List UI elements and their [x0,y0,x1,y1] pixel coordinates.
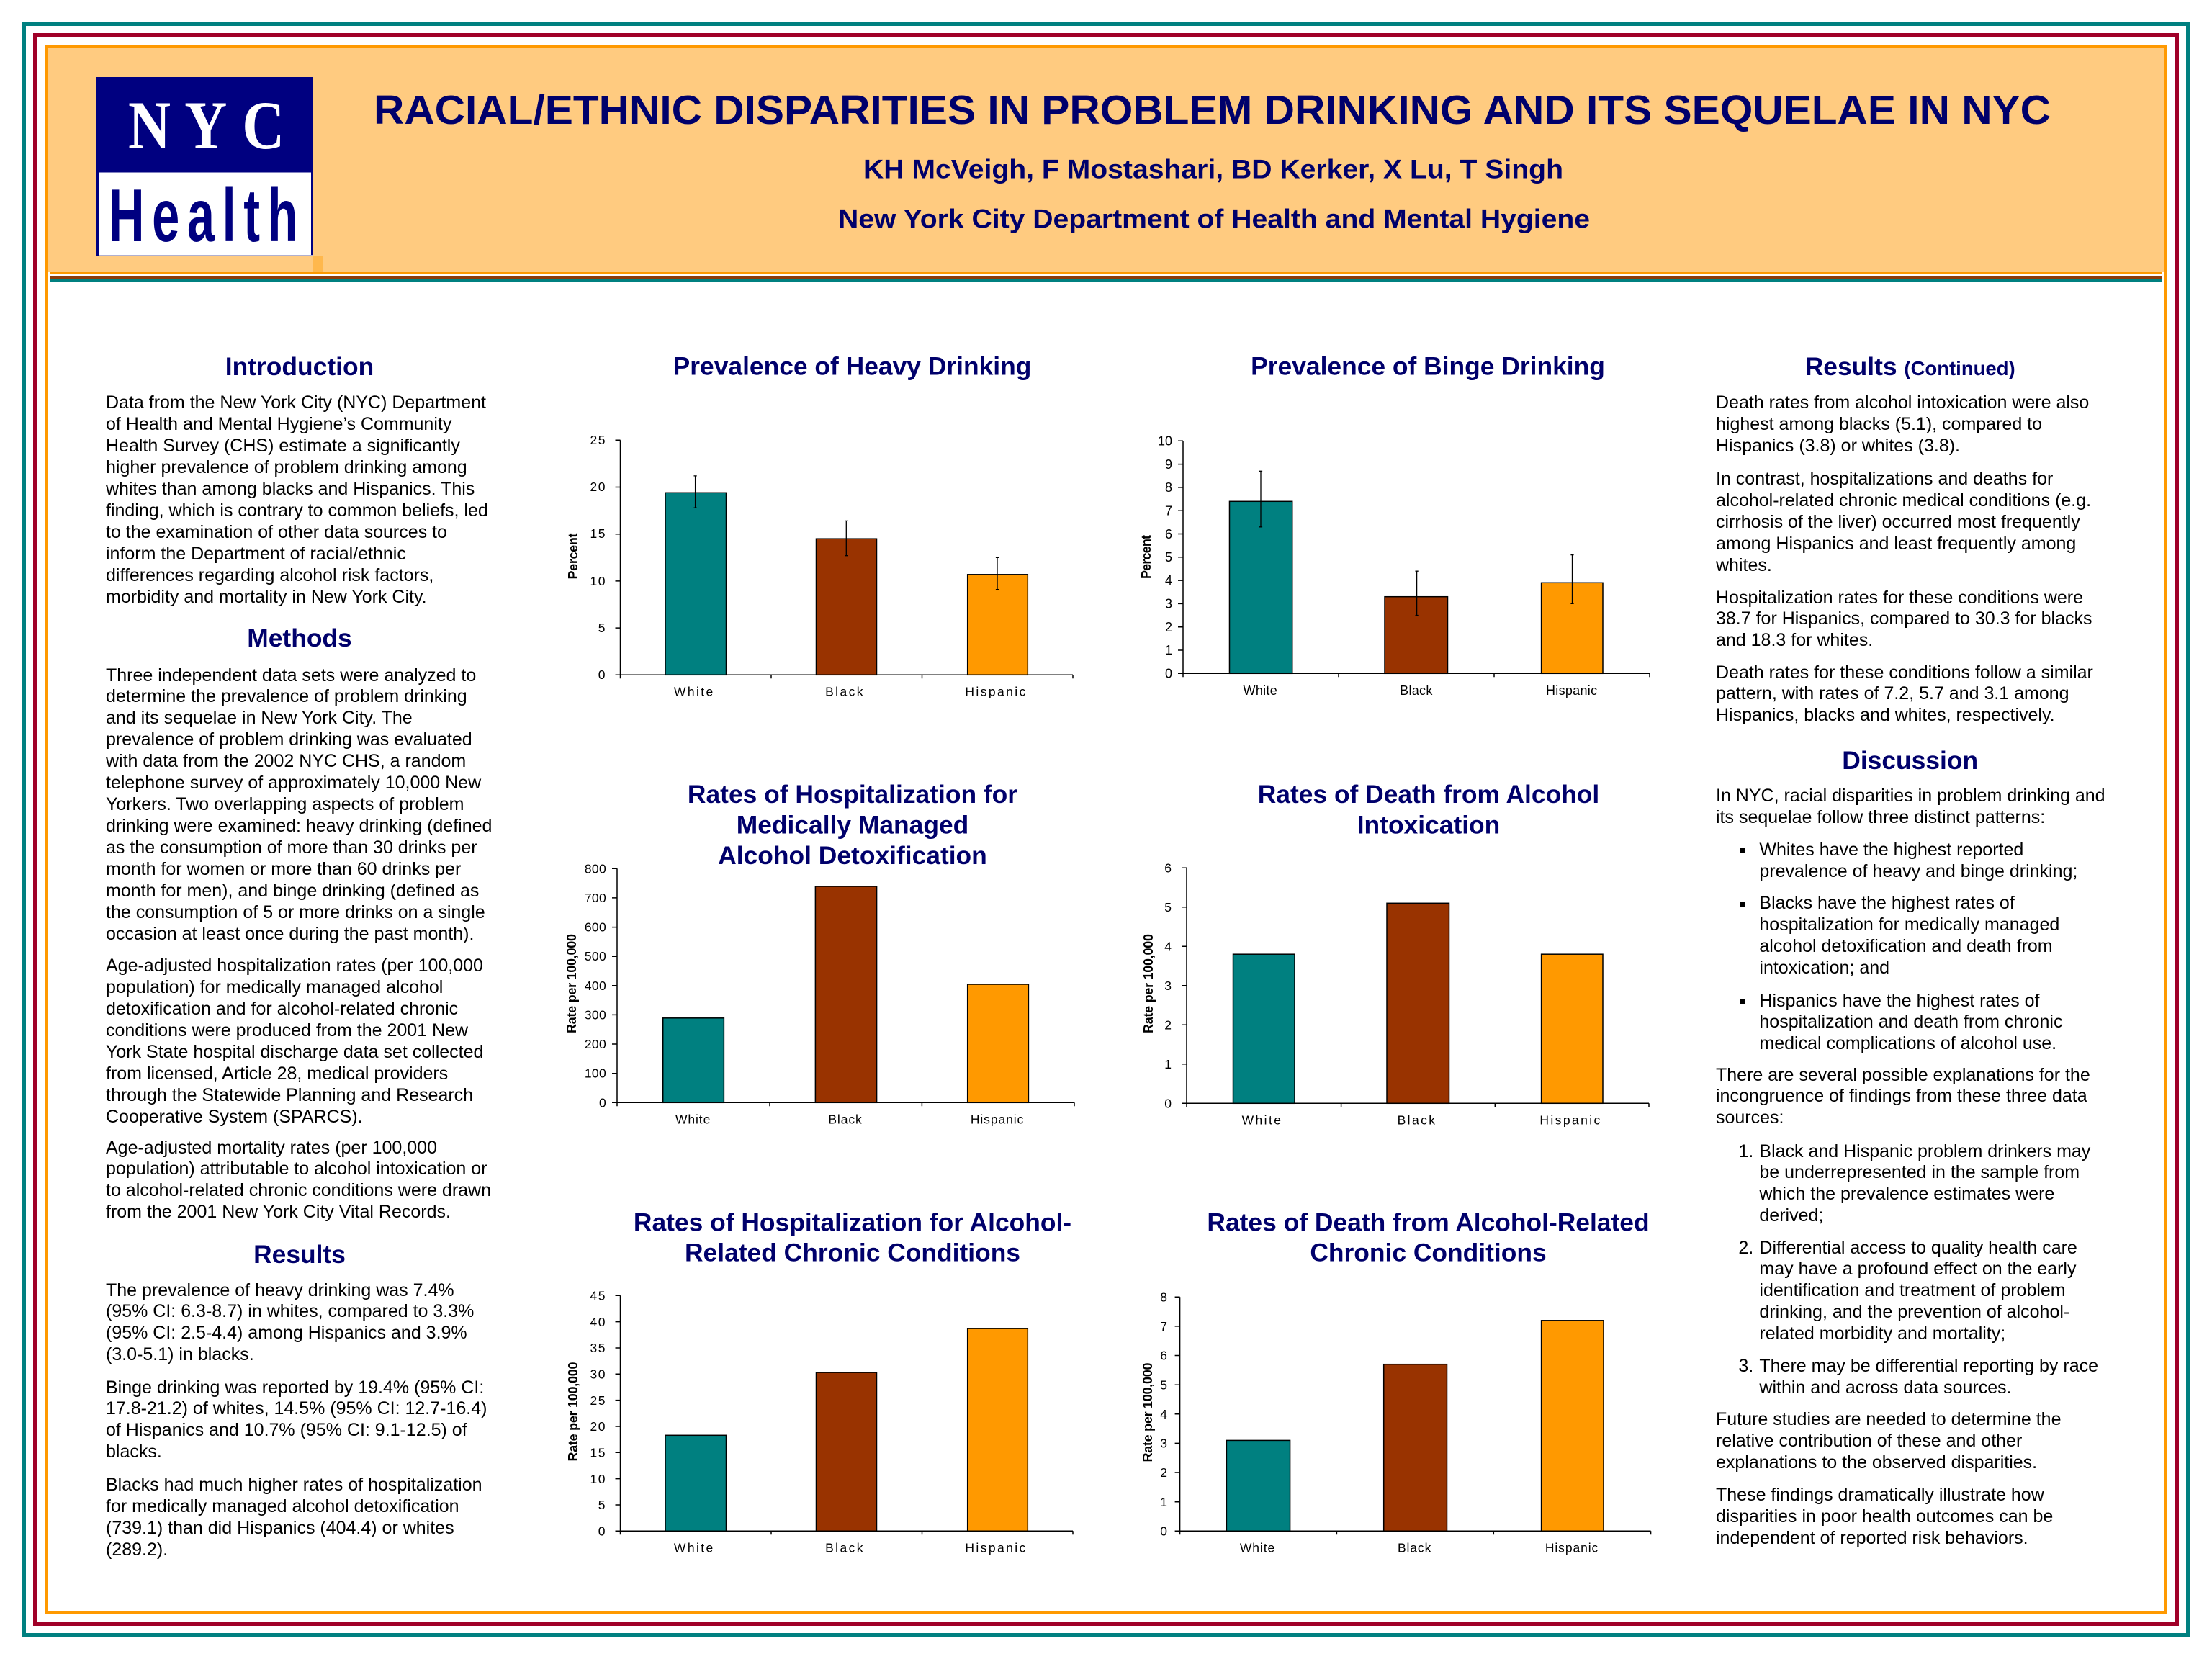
text: results continued paragraph 2: whites. [1716,555,1772,575]
heading: Discussion: Discussion [1842,746,1978,775]
bars [1230,501,1603,673]
text: results paragraph 2 [106,1377,487,1462]
text: methods paragraph 2: population) for medically managed alcohol [106,977,443,997]
y axis title: Percent [566,533,580,579]
bars [1233,903,1603,1103]
bars [1226,1321,1604,1531]
chart title: Medically Managed [737,810,968,839]
header rule: brown [50,276,2162,278]
y axis labels: 0 [598,667,606,682]
text: methods paragraph 3: population) attributable to alcohol intoxication or [106,1159,487,1179]
y axis labels: 1 [1160,1495,1167,1509]
chart title: Rates of Death from Alcohol [1258,780,1599,809]
y axis labels: 400 [585,979,606,993]
numbered item 2: related morbidity and mortality; [1759,1323,2005,1344]
text: introduction [106,392,488,607]
text: results continued paragraph 3 [1716,588,2092,652]
y axis labels: 700 [585,891,606,905]
category labels: Hispanic [971,1112,1024,1127]
text: methods paragraph 2: Cooperative System (SPARCS). [106,1107,363,1127]
icon: NYC Health logo: Y [184,88,227,163]
text: conclusion: independent of reported risk behaviors. [1716,1528,2028,1548]
text: results paragraph 1: (95% CI: 6.3-8.7) in whites, compared to 3.3% [106,1301,474,1321]
text: conclusion: disparities in poor health outcomes can be [1716,1506,2053,1527]
chart title: Related Chronic Conditions [685,1238,1020,1267]
y axis labels: 500 [585,949,606,963]
category labels: Hispanic [1546,683,1597,698]
category labels: Black [1400,683,1433,698]
text: results continued paragraph 2: alcohol-related chronic medical conditions (e.g. [1716,490,2091,511]
title: RACIAL/ETHNIC DISPARITIES IN PROBLEM DRINKING AND ITS SEQUELAE IN NYC [374,87,2051,133]
bullet: blacks [1759,893,2059,979]
error bars [694,476,999,590]
text: methods paragraph 1: with data from the 2002 NYC CHS, a random [106,751,466,771]
text: methods paragraph 3: from the 2001 New York City Vital Records. [106,1202,451,1222]
y axis labels [590,1289,606,1538]
text: methods paragraph 2: York State hospital discharge data set collected [106,1042,483,1062]
chart title: Rates of Hospitalization for Alcohol- [634,1208,1071,1236]
category labels [675,1112,1024,1127]
y axis labels: 4 [1160,1407,1167,1421]
chart: prevalence of binge drinking [1139,352,1650,698]
chart: hospitalization for medically managed detoxification [565,780,1075,1127]
y axis labels: 5 [598,1498,606,1512]
text: conclusion: These findings dramatically illustrate how [1716,1485,2044,1505]
chart title: Alcohol Detoxification [718,841,987,870]
numbered item 1: be underrepresented in the sample from [1759,1162,2080,1182]
numbered item 3 [1759,1356,2098,1399]
text: results continued paragraph 4: pattern, with rates of 7.2, 5.7 and 3.1 among [1716,683,2069,703]
y axis labels: 5 [1165,550,1172,565]
category labels: Hispanic [965,685,1028,699]
y axis labels: 300 [585,1008,606,1022]
text: results paragraph 3: (289.2). [106,1539,168,1560]
y axis labels [1158,433,1172,681]
text: conclusion [1716,1485,2053,1550]
bars [665,1328,1028,1531]
text: results continued paragraph 2 [1716,469,2091,577]
axes [1178,441,1650,677]
y axis labels: 10 [1158,433,1172,448]
text: results paragraph 2: of Hispanics and 10.7% (95% CI: 9.1-12.5) of [106,1420,467,1440]
text: introduction: morbidity and mortality in New York City. [106,587,427,607]
text: future studies [1716,1409,2061,1474]
category labels [1244,683,1597,698]
y axis labels: 600 [585,920,606,935]
bars [663,886,1028,1102]
heading: Introduction: Introduction [225,352,374,381]
y axis labels: 0 [1165,667,1172,681]
icon: NYC Health logo [96,77,313,257]
chart: death from alcohol intoxication [1141,780,1650,1128]
y axis labels: 9 [1165,457,1172,472]
text: future studies: explanations to the observed disparities. [1716,1452,2037,1473]
y axis labels: 0 [598,1524,606,1538]
heading: Methods: Methods [247,624,352,652]
text: results continued paragraph 3: and 18.3 for whites. [1716,630,1873,650]
text: methods paragraph 2: conditions were produced from the 2001 New [106,1020,468,1040]
y axis labels: 8 [1165,480,1172,495]
text: methods paragraph 1: month for women or more than 60 drinks per [106,859,461,879]
text: results continued paragraph 2: among Hispanics and least frequently among [1716,534,2076,554]
y axis labels: 0 [1164,1096,1172,1110]
bullet: blacks: intoxication; and [1759,958,1889,978]
category labels: Hispanic [1539,1113,1602,1128]
bullet: blacks: alcohol detoxification and death from [1759,936,2053,956]
text: introduction: whites than among blacks and Hispanics. This [106,479,475,499]
y axis labels: 10 [590,1472,606,1486]
text: results paragraph 2: Binge drinking was reported by 19.4% (95% CI: [106,1377,484,1397]
title [374,87,2051,234]
text: results continued paragraph 1: Hispanics (3.8) or whites (3.8). [1716,436,1960,456]
y axis labels: 5 [1164,900,1172,914]
numbered item 2: may have a profound effect on the early [1759,1259,2077,1279]
text: methods paragraph 2: from licensed, Article 28, medical providers [106,1064,448,1084]
y axis labels [1160,1290,1167,1538]
text: discussion intro [1716,786,2105,829]
heading: Results: Results [253,1240,346,1269]
bullet: whites: Whites have the highest reported [1759,840,2023,860]
category labels: Hispanic [1545,1541,1599,1555]
text: explanations intro: incongruence of findings from these three data [1716,1086,2087,1106]
text: methods paragraph 1: prevalence of problem drinking was evaluated [106,729,472,750]
y axis labels: 3 [1164,979,1172,993]
y axis labels: 7 [1165,504,1172,518]
text: introduction: Data from the New York City (NYC) Department [106,392,486,413]
y axis labels: 25 [590,433,606,447]
text: methods paragraph 3: Age-adjusted mortality rates (per 100,000 [106,1138,437,1158]
panel: right text column [1716,352,2105,1548]
text: methods paragraph 1: Yorkers. Two overlapping aspects of problem [106,794,464,814]
category labels: White [1240,1541,1275,1555]
header band [48,48,2164,272]
y axis labels: 20 [590,1419,606,1434]
category labels: Black [1398,1541,1431,1555]
chart title: Prevalence of Binge Drinking [1251,352,1605,381]
y axis labels: 10 [590,574,606,588]
text: results paragraph 1: (3.0-5.1) in blacks. [106,1344,254,1364]
category labels: White [1242,1113,1282,1128]
panel: right text column: 1. [1738,1141,1753,1161]
y axis labels: 8 [1160,1290,1167,1305]
y axis title: Rate per 100,000 [1141,1362,1155,1462]
text: methods paragraph 2: detoxification and for alcohol-related chronic [106,999,458,1019]
text: methods paragraph 1 [106,665,492,944]
y axis labels: 25 [590,1393,606,1408]
error bars [1259,471,1574,615]
y axis labels: 800 [585,861,606,876]
text: results paragraph 2: blacks. [106,1442,162,1462]
y axis labels: 0 [1160,1524,1167,1538]
y axis labels: 45 [590,1289,606,1303]
logo tab [313,256,323,272]
text: explanations intro: sources: [1716,1107,1784,1128]
category labels: Black [825,1541,865,1555]
bullet: whites [1759,840,2077,883]
y axis title: Percent [1139,535,1154,579]
icon: NYC Health logo: N [128,88,171,163]
y axis title: Rate per 100,000 [566,1362,580,1462]
text: methods paragraph 1: as the consumption of more than 30 drinks per [106,837,477,858]
text: results paragraph 2: 17.8-21.2) of whites, 14.5% (95% CI: 12.7-16.4) [106,1398,487,1419]
text: discussion intro: In NYC, racial disparities in problem drinking and [1716,786,2105,806]
text: discussion intro: its sequelae follow three distinct patterns: [1716,807,2045,827]
heading: Results (Continued): Results (Continued) [1805,352,2015,381]
axes [1182,868,1649,1107]
axes [615,440,1073,678]
text: future studies: Future studies are needed to determine the [1716,1409,2061,1429]
bullet: hispanics: Hispanics have the highest rates of [1759,991,2040,1011]
text: results paragraph 3 [106,1475,482,1560]
category labels [674,685,1028,699]
y axis labels [590,433,606,682]
text: introduction: to the examination of other data sources to [106,522,447,542]
text: methods paragraph 1: Three independent data sets were analyzed to [106,665,476,685]
y axis labels: 15 [590,526,606,541]
numbered item 1: which the prevalence estimates were [1759,1184,2054,1204]
y axis labels [1164,861,1172,1110]
y axis labels: 20 [590,480,606,494]
y axis labels: 100 [585,1066,606,1080]
y axis labels: 6 [1165,527,1172,541]
chart title [1258,780,1599,839]
text: results continued paragraph 2: In contrast, hospitalizations and deaths for [1716,469,2053,489]
chart title: Chronic Conditions [1310,1238,1547,1267]
bullet: hispanics: hospitalization and death from chronic [1759,1012,2062,1032]
y axis labels: 6 [1164,861,1172,876]
y axis labels: 35 [590,1341,606,1355]
numbered item 1: Black and Hispanic problem drinkers may [1759,1141,2090,1161]
text: methods paragraph 1: occasion at least once during the past month). [106,924,474,944]
numbered item 3: There may be differential reporting by race [1759,1356,2098,1376]
y axis title: Rate per 100,000 [565,934,579,1033]
numbered item 2: Differential access to quality health care [1759,1237,2077,1257]
text: results continued paragraph 2: cirrhosis of the liver) occurred most frequently [1716,512,2080,532]
text: results continued paragraph 1: highest among blacks (5.1), compared to [1716,414,2042,434]
category labels [1240,1541,1599,1555]
text: methods paragraph 2 [106,956,483,1127]
chart title: Rates of Hospitalization for [688,780,1017,809]
numbered item 3: within and across data sources. [1759,1377,2012,1398]
chart: prevalence of heavy drinking [566,352,1074,699]
numbered item 1 [1759,1141,2090,1227]
y axis labels: 7 [1160,1319,1167,1334]
category labels [1242,1113,1602,1128]
text: results continued paragraph 3: 38.7 for Hispanics, compared to 30.3 for blacks [1716,608,2092,629]
chart title: Prevalence of Heavy Drinking [673,352,1031,381]
text: methods paragraph 1: the consumption of 5 or more drinks on a single [106,902,485,922]
y axis labels: 30 [590,1367,606,1381]
y axis labels: 1 [1165,643,1172,657]
text: results continued paragraph 4: Death rates for these conditions follow a similar [1716,662,2093,683]
y axis labels: 0 [599,1096,606,1110]
category labels: White [1244,683,1277,698]
text: results paragraph 3: (739.1) than did Hispanics (404.4) or whites [106,1518,454,1538]
numbered item 2 [1759,1237,2077,1345]
text: methods paragraph 2: Age-adjusted hospitalization rates (per 100,000 [106,956,483,976]
axes [1175,1297,1651,1534]
y axis labels: 6 [1160,1348,1167,1362]
header rule: teal [50,279,2162,282]
affiliation: New York City Department of Health and Mental Hygiene [838,204,1590,234]
text: results paragraph 1 [106,1280,474,1364]
text: introduction: finding, which is contrary to common beliefs, led [106,500,488,521]
text: results paragraph 1: The prevalence of heavy drinking was 7.4% [106,1280,454,1300]
y axis labels: 3 [1160,1436,1167,1450]
text: results paragraph 1: (95% CI: 2.5-4.4) among Hispanics and 3.9% [106,1323,467,1343]
y axis labels: 4 [1165,573,1172,588]
text: methods paragraph 3: to alcohol-related chronic conditions were drawn [106,1180,491,1200]
y axis labels: 200 [585,1037,606,1051]
text: methods paragraph 1: drinking were examined: heavy drinking (defined [106,816,492,836]
authors: KH McVeigh, F Mostashari, BD Kerker, X Lu, T Singh [863,154,1563,184]
text: methods paragraph 1: and its sequelae in New York City. The [106,708,413,728]
y axis labels: 2 [1160,1465,1167,1480]
bullet: blacks: Blacks have the highest rates of [1759,893,2015,913]
text: results continued paragraph 3: Hospitalization rates for these conditions were [1716,588,2083,608]
chart: hospitalization for chronic conditions [566,1208,1074,1555]
y axis labels: 15 [590,1446,606,1460]
text: methods paragraph 1: determine the prevalence of problem drinking [106,686,467,706]
chart: death from chronic conditions [1141,1208,1652,1555]
bullet: whites: prevalence of heavy and binge drinking; [1759,861,2077,881]
bullet: hispanics [1759,991,2062,1055]
chart title [688,780,1017,870]
text: explanations intro [1716,1064,2090,1129]
axes [612,868,1074,1106]
category labels: Black [825,685,865,699]
chart title: Rates of Death from Alcohol-Related [1207,1208,1650,1236]
category labels: White [674,1541,715,1555]
bullet: hispanics: medical complications of alcohol use. [1759,1033,2056,1053]
y axis title: Rate per 100,000 [1141,934,1156,1033]
numbered item 1: derived; [1759,1205,1823,1226]
y axis labels: 2 [1164,1018,1172,1033]
y axis labels: 3 [1165,596,1172,611]
icon: NYC Health logo: C [242,88,284,163]
panel: left text column [106,352,492,1560]
chart title [634,1208,1071,1267]
panel: right text column: 3. [1738,1356,1753,1376]
text: results continued paragraph 1: Death rates from alcohol intoxication were also [1716,392,2089,413]
chart title [1207,1208,1650,1267]
category labels: Hispanic [965,1541,1028,1555]
text: methods paragraph 2: through the Statewide Planning and Research [106,1085,473,1105]
text: results continued paragraph 4: Hispanics, blacks and whites, respectively. [1716,705,2055,725]
text: introduction: of Health and Mental Hygiene’s Community [106,414,451,434]
text: results continued paragraph 4 [1716,662,2093,727]
numbered item 2: identification and treatment of problem [1759,1280,2066,1300]
chart title: Intoxication [1357,810,1500,839]
text: methods paragraph 1: month for men), and binge drinking (defined as [106,881,479,901]
axes [615,1295,1073,1534]
text: methods paragraph 3 [106,1138,491,1222]
text: introduction: differences regarding alcohol risk factors, [106,565,433,585]
text: introduction: higher prevalence of problem drinking among [106,457,467,477]
category labels [674,1541,1028,1555]
text: introduction: inform the Department of racial/ethnic [106,544,406,564]
y axis labels: 40 [590,1315,606,1329]
y axis labels: 4 [1164,939,1172,953]
category labels: Black [1398,1113,1437,1128]
text: introduction: Health Survey (CHS) estimate a significantly [106,436,460,456]
text: explanations intro: There are several possible explanations for the [1716,1064,2090,1084]
category labels: White [674,685,715,699]
text: results paragraph 3: Blacks had much higher rates of hospitalization [106,1475,482,1495]
text: methods paragraph 1: telephone survey of approximately 10,000 New [106,773,481,793]
panel: right text column: 2. [1738,1237,1753,1257]
header rule: orange [50,272,2162,274]
numbered item 2: drinking, and the prevention of alcohol- [1759,1302,2069,1322]
y axis labels: 1 [1164,1057,1172,1071]
category labels: White [675,1112,711,1127]
text: results continued paragraph 1 [1716,392,2089,456]
icon: NYC Health logo: Health [109,174,305,257]
category labels: Black [828,1112,863,1127]
y axis labels: 5 [598,621,606,635]
y axis labels [585,861,606,1110]
bullet: blacks: hospitalization for medically managed [1759,914,2059,935]
text: future studies: relative contribution of these and other [1716,1431,2022,1451]
text: results paragraph 3: for medically managed alcohol detoxification [106,1496,459,1516]
bars [665,493,1028,675]
y axis labels: 2 [1165,620,1172,634]
y axis labels: 5 [1160,1378,1167,1393]
